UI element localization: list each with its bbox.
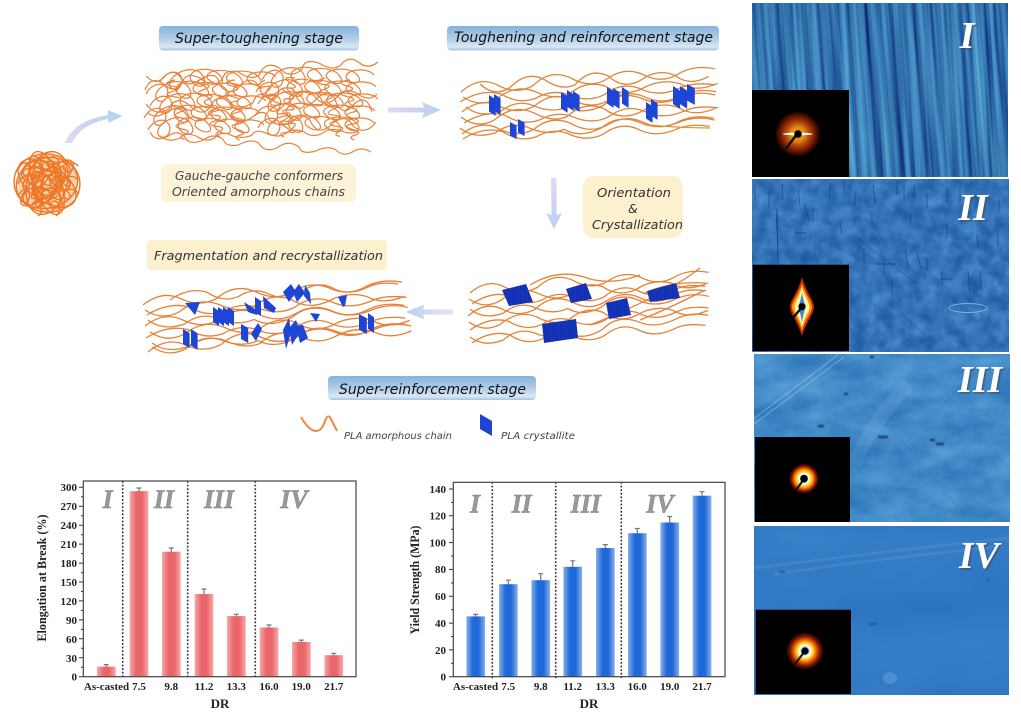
stage dividers <box>123 481 255 677</box>
bars <box>97 491 343 677</box>
stage labels: I <box>469 490 481 518</box>
icon: tangled polymer ball <box>9 147 85 219</box>
stage labels: III <box>203 485 235 514</box>
y axis ticks: 210 <box>60 539 78 551</box>
bars <box>466 496 711 677</box>
chain bundle: entangled oriented amorphous chains <box>144 59 378 154</box>
x axis labels: 21.7 <box>324 681 344 693</box>
panel: micrograph III <box>752 354 1010 522</box>
crystallite block 1 <box>502 284 533 306</box>
x axis labels: 13.3 <box>227 681 246 693</box>
x axis labels: DR <box>211 696 230 711</box>
x axis labels: 7.5 <box>132 681 146 693</box>
x axis labels: 19.0 <box>292 681 311 693</box>
legend: PLA crystallite: PLA crystallite <box>501 431 575 442</box>
y axis ticks: 240 <box>60 520 78 532</box>
error bars <box>473 492 704 616</box>
arrow: down to orientation stage <box>546 178 562 229</box>
heading: Super-toughening stage <box>159 26 359 50</box>
x axis labels: 9.8 <box>534 681 548 693</box>
stage labels: II <box>153 485 175 514</box>
stage labels <box>102 485 310 514</box>
y axis ticks: 0 <box>440 672 446 684</box>
panel label II: II <box>957 187 989 229</box>
callout: Gauche-gauche conformers / Oriented amorphous chains: Oriented amorphous chains <box>172 184 345 199</box>
y axis ticks: 20 <box>435 645 446 657</box>
callout: Orientation & Crystallization: Orientation <box>597 185 671 200</box>
x axis labels: 13.3 <box>596 681 615 693</box>
stage labels <box>469 490 676 518</box>
legend: PLA amorphous chain: PLA amorphous chain <box>344 431 452 442</box>
y axis ticks: 300 <box>60 482 78 494</box>
x axis labels: DR <box>580 696 599 711</box>
stage labels: III <box>570 490 602 518</box>
heading: Super-reinforcement stage <box>328 376 536 400</box>
plot frame <box>453 482 725 677</box>
y axis ticks: 120 <box>60 596 78 608</box>
stage labels: IV <box>645 490 676 518</box>
legend: PLA crystallite <box>480 414 575 442</box>
chain bundle: chains with small crystallites <box>460 65 719 143</box>
y axis ticks: 90 <box>66 615 78 627</box>
y axis ticks: 150 <box>60 577 78 589</box>
bar chart: Elongation at Break <box>34 481 356 711</box>
error bars <box>104 488 336 667</box>
y axis ticks: 120 <box>430 510 446 522</box>
heading: Super-reinforcement stage: Super-reinforcement stage <box>339 382 526 398</box>
stage labels: II <box>511 490 533 518</box>
y axis ticks: 270 <box>60 501 78 513</box>
crystallite block 3 <box>606 298 631 319</box>
inset: scattering pattern II <box>753 265 849 351</box>
y axis ticks: 60 <box>435 591 446 603</box>
x axis labels: 9.8 <box>164 681 179 693</box>
x axis labels <box>84 681 344 711</box>
arrow: curved from ball to first chain bundle <box>65 110 122 143</box>
panel: micrograph IV <box>754 526 1009 695</box>
x axis labels: 19.0 <box>660 681 680 693</box>
panel: micrograph I <box>714 0 1021 224</box>
callout: Fragmentation and recrystallization: Fragmentation and recrystallization <box>154 248 383 263</box>
crystallite block 2 <box>566 283 592 303</box>
panel label III: III <box>957 359 1003 401</box>
y axis title: Elongation at Break (%) <box>34 514 49 642</box>
callout: Gauche-gauche conformers / Oriented amorphous chains <box>161 164 356 202</box>
heading: Toughening and reinforcement stage <box>447 26 719 50</box>
x axis labels: 21.7 <box>692 681 712 693</box>
bar chart: Yield Strength <box>407 482 725 711</box>
y axis ticks: 80 <box>435 564 446 576</box>
arrow: right to toughening stage <box>388 102 441 118</box>
plot frame <box>83 481 356 677</box>
x axis labels: 11.2 <box>195 681 214 693</box>
stage dividers <box>492 482 621 680</box>
callout: Orientation & Crystallization: & <box>628 201 638 216</box>
callout: Fragmentation and recrystallization <box>147 240 387 270</box>
panel: micrograph II <box>752 179 1009 352</box>
inset: scattering pattern IV <box>756 610 851 694</box>
inset: scattering pattern III <box>755 437 850 522</box>
chain bundle: chains with large crystallites <box>467 268 709 347</box>
heading: Toughening and reinforcement stage: Toughening and reinforcement stage <box>454 30 713 46</box>
y axis ticks: 30 <box>66 653 78 665</box>
x axis labels: 7.5 <box>501 681 516 693</box>
y axis ticks: 140 <box>430 484 446 496</box>
x axis labels: 11.2 <box>563 681 583 693</box>
x axis labels: 16.0 <box>259 681 279 693</box>
y axis ticks <box>60 482 83 684</box>
chain bundle: fragmented crystallites in oriented chains <box>142 279 412 354</box>
arrow: left to fragmentation stage <box>406 304 453 320</box>
x axis labels: As-casted <box>84 681 129 693</box>
x axis labels <box>453 681 712 711</box>
callout: Orientation & Crystallization <box>583 176 683 238</box>
y axis ticks: 0 <box>72 672 78 684</box>
panel label IV: IV <box>958 535 1002 577</box>
panel label I: I <box>959 15 976 57</box>
x axis labels: As-casted <box>453 681 498 693</box>
callout: Gauche-gauche conformers / Oriented amorphous chains: Gauche-gauche conformers <box>175 168 343 183</box>
heading: Super-toughening stage: Super-toughening stage <box>175 31 343 47</box>
stage labels: I <box>102 485 114 514</box>
y axis ticks: 180 <box>60 558 78 570</box>
callout: Orientation & Crystallization: Crystallization <box>592 217 683 232</box>
crystallite block 4 <box>647 283 680 302</box>
y axis ticks <box>430 484 453 684</box>
y axis ticks: 100 <box>430 538 446 550</box>
crystallite block 5 <box>542 319 578 343</box>
inset: scattering pattern I <box>752 90 849 177</box>
y axis ticks: 40 <box>435 618 446 630</box>
stage labels: IV <box>279 485 310 514</box>
y axis ticks: 60 <box>66 634 78 646</box>
x axis labels: 16.0 <box>628 681 647 693</box>
legend: PLA amorphous chain <box>301 416 452 442</box>
y axis title: Yield Strength (MPa) <box>407 526 422 634</box>
